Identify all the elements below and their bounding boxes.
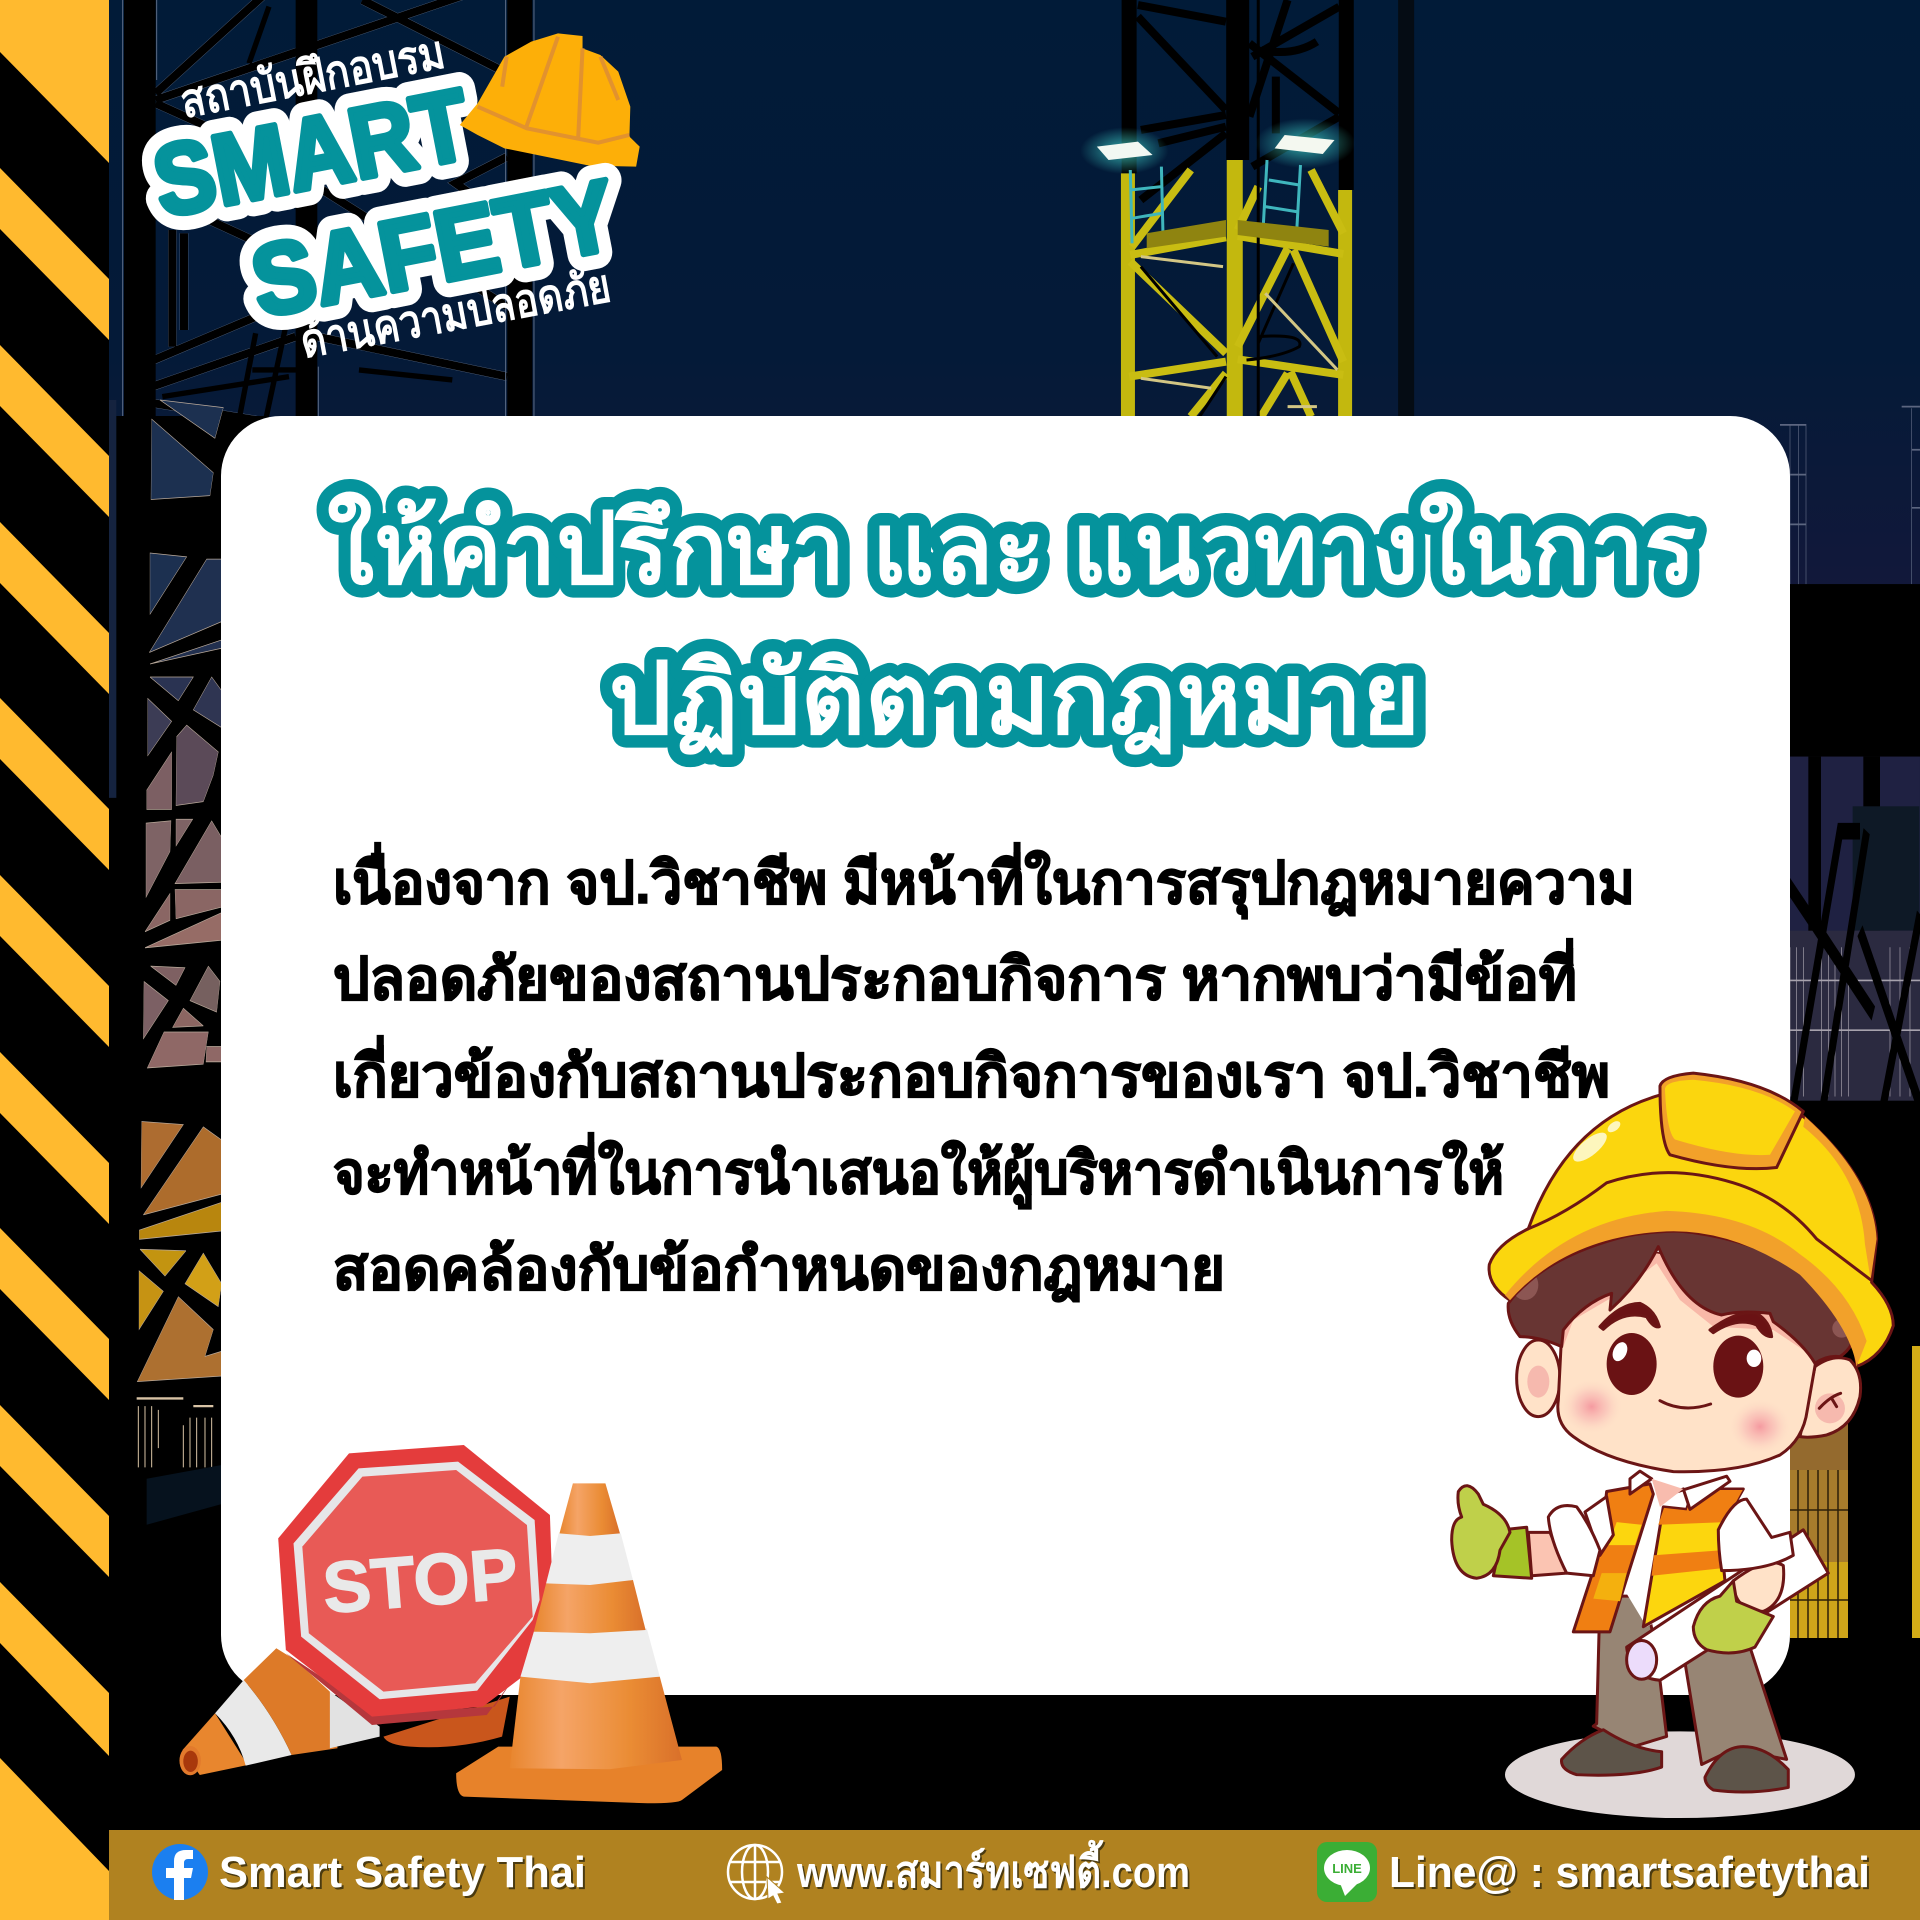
illustration: worker character giving thumbs up — [1452, 1073, 1893, 1818]
title: ให้คำปรึกษา และ แนวทางในการ — [327, 491, 1696, 605]
logo: Smart Safety — [145, 25, 640, 368]
background: right side building silhouette — [1780, 407, 1920, 1706]
globe cursor icon — [728, 1845, 785, 1904]
facebook label: Smart Safety Thai — [219, 1848, 586, 1897]
body text: ปลอดภัยของสถานประกอบกิจการ หากพบว่ามีข้อที่ — [333, 938, 1577, 1012]
body text — [333, 842, 1635, 1302]
logo word SAFETY: SAFETY — [243, 159, 624, 339]
body text: เกี่ยวข้องกับสถานประกอบกิจการของเรา จป.วิชาชีพ — [333, 1035, 1610, 1109]
hazard stripes on the left edge — [0, 0, 109, 1920]
background: left tower truss — [123, 0, 534, 427]
logo word SMART: SMART — [145, 68, 478, 239]
fallen traffic cone — [179, 1648, 510, 1775]
line label: Line@ : smartsafetythai — [1389, 1848, 1870, 1897]
line icon: LINE — [1332, 1861, 1362, 1876]
website label: www.สมาร์ทเซฟตี้.com — [796, 1839, 1190, 1897]
title: ปฏิบัติตามกฎหมาย — [609, 643, 1420, 756]
illustration: fallen cone, stop sign and standing cone — [179, 1445, 722, 1803]
logo word SAFETY: SAFETY — [243, 159, 624, 339]
logo tagline top: สถาบันฝึกอบรม — [176, 25, 449, 128]
shirt and vest — [1573, 1471, 1767, 1632]
body text: จะทำหน้าที่ในการนำเสนอให้ผู้บริหารดำเนินการให้ — [333, 1132, 1504, 1209]
left arm and thumbs-up glove — [1452, 1486, 1613, 1578]
yellow hard hat — [1489, 1073, 1893, 1367]
background: right side sunset fence panels — [1790, 1346, 1920, 1638]
legs and shoes — [1561, 1596, 1788, 1792]
background: left black tower body — [109, 416, 269, 1716]
title — [327, 491, 1696, 756]
ground shadow — [1505, 1731, 1855, 1818]
background: left tower windows against the sunset — [109, 400, 230, 1525]
head — [1508, 1229, 1861, 1472]
facebook icon — [152, 1844, 208, 1900]
footer bar — [109, 1830, 1920, 1920]
logo word SMART: SMART — [145, 68, 478, 239]
body text: สอดคล้องกับข้อกำหนดของกฎหมาย — [333, 1237, 1225, 1302]
stop sign — [278, 1445, 553, 1725]
body text: เนื่องจาก จป.วิชาชีพ มีหน้าที่ในการสรุปกฎหมายความ — [333, 842, 1635, 920]
logo helmet — [460, 33, 640, 167]
standing traffic cone — [456, 1483, 722, 1803]
background: centre crane tower with floodlights — [1080, 0, 1406, 417]
panel: main white card — [221, 416, 1790, 1695]
blueprint roll — [1627, 1530, 1828, 1680]
logo tagline bottom: ด้านความปลอดภัย — [296, 258, 615, 368]
stop sign: STOP — [320, 1534, 521, 1629]
line icon — [1317, 1842, 1377, 1902]
right arm and glove — [1693, 1499, 1793, 1653]
